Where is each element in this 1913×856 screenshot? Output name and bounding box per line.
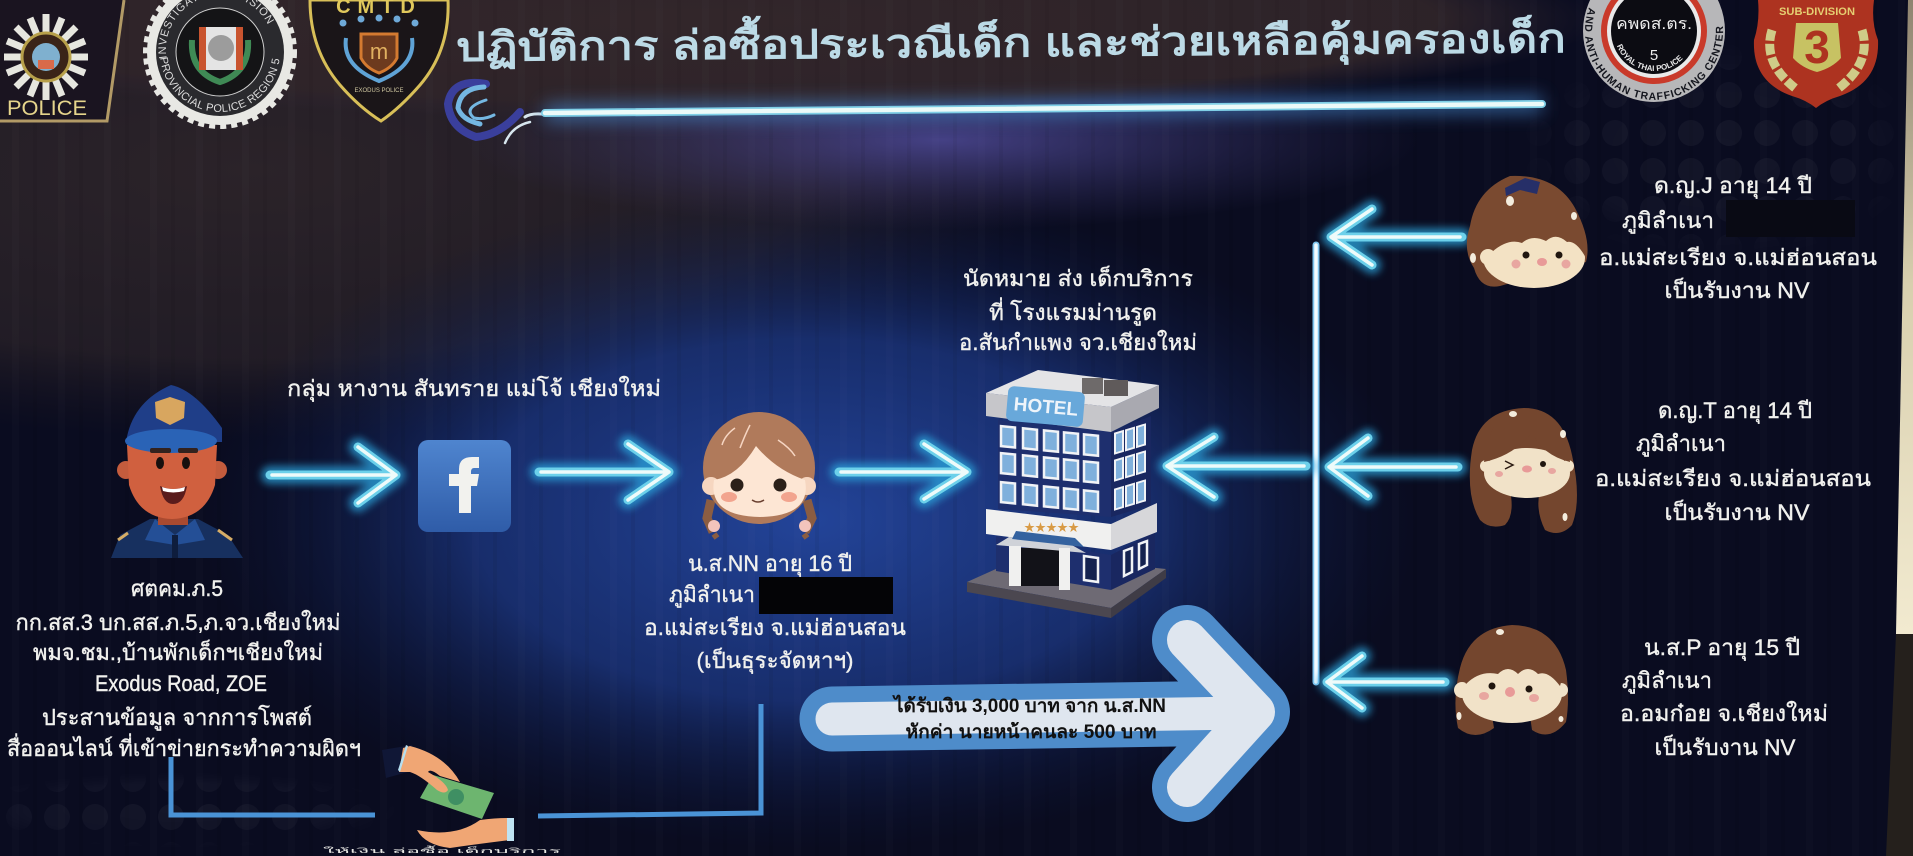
logo: CMTD shield: [310, 0, 448, 121]
logo: CMTD shield: m: [370, 39, 388, 64]
redaction block: [1726, 200, 1855, 237]
girl NN text block: (เป็นธุระจัดหาฯ): [696, 646, 854, 674]
officer text block: พมจ.ชม.,บ้านพักเด็กฯเชียงใหม่: [33, 638, 323, 665]
girl T illustration: [1470, 408, 1577, 533]
title: ปฏิบัติการ ล่อซื้อประเวณีเด็ก และช่วยเหลือคุ้มครองเด็ก: [456, 9, 1566, 73]
arrow: junction to hotel: [1167, 437, 1306, 497]
girl NN text block: น.ส.NN อายุ 16 ปี: [688, 551, 852, 577]
hotel label: อ.สันกำแพง จว.เชียงใหม่: [959, 330, 1197, 355]
officer text block: ประสานข้อมูล จากการโพสต์: [42, 705, 312, 731]
logo: anti human trafficking center: AND ANTI-HUMAN TRAFFICKING CENTER: [1585, 8, 1724, 100]
officer text block: [7, 576, 361, 761]
logo: sub-division 3: 3: [1804, 21, 1830, 73]
facebook group label: กลุ่ม หางาน สันทราย แม่โจ้ เชียงใหม่: [287, 376, 661, 402]
girl T text block: ภูมิลำเนา: [1636, 431, 1726, 457]
girl P illustration: [1454, 625, 1568, 735]
officer text block: Exodus Road, ZOE: [95, 671, 267, 696]
arrow: girl to hotel: [839, 444, 967, 499]
logo: police badge: [0, 0, 124, 121]
hotel label: ที่ โรงแรมม่านรูด: [989, 297, 1157, 326]
big arrow: payment: [832, 640, 1255, 787]
icon: facebook: [418, 440, 511, 532]
logo: sub-division 3: [1754, 0, 1878, 108]
girl J text block: [1599, 173, 1877, 303]
hotel label: นัดหมาย ส่ง เด็กบริการ: [963, 264, 1193, 291]
arrow: girl T: [1329, 438, 1458, 496]
girl NN text block: อ.แม่สะเรียง จ.แม่ฮ่อนสอน: [644, 615, 906, 640]
logo: anti human trafficking center: ROYAL THAI POLICE: [1617, 44, 1683, 71]
hotel sign: [1006, 386, 1085, 427]
vertical connector: victims to hotel: [1309, 245, 1323, 682]
connector: money flow lines: [171, 704, 761, 816]
arrow: facebook to girl: [539, 444, 669, 500]
girl T text block: เป็นรับงาน NV: [1664, 498, 1810, 525]
girl NN text block: ภูมิลำเนา: [669, 582, 755, 608]
money caption, only a sliver visible at the bottom edge: ให้เงิน ล่อซื้อ เด็กบริการ: [323, 844, 562, 855]
girl J text block: ภูมิลำเนา: [1622, 208, 1714, 234]
girl J text block: ด.ญ.J อายุ 14 ปี: [1654, 173, 1812, 199]
redaction block: [759, 577, 893, 614]
girl P text block: อ.อมก๋อย จ.เชียงใหม่: [1620, 701, 1828, 726]
arrow: girl J: [1331, 209, 1462, 265]
logo: anti human trafficking center: 5: [1650, 47, 1658, 64]
logo: CMTD shield: EXODUS POLICE: [354, 88, 404, 94]
arrow: girl P: [1327, 656, 1445, 708]
icon: wave swirl: [448, 83, 550, 143]
officer text block: สื่อออนไลน์ ที่เข้าข่ายกระทำความผิดฯ: [7, 733, 361, 761]
officer text block: กก.สส.3 บก.สส.ภ.5,ภ.จว.เชียงใหม่: [16, 610, 340, 635]
officer text block: ศตคม.ภ.5: [131, 576, 223, 601]
logo: provincial police region 5: [143, 0, 297, 129]
girl T text block: [1595, 398, 1871, 525]
hotel label: [959, 264, 1197, 355]
payment text: ได้รับเงิน 3,000 บาท จาก น.ส.NN: [892, 694, 1166, 717]
girl J text block: เป็นรับงาน NV: [1664, 276, 1810, 303]
girl P text block: [1620, 635, 1828, 760]
hotel illustration: ★★★★★: [1024, 522, 1079, 534]
hotel illustration: [967, 370, 1166, 618]
girl NN text block: [644, 551, 906, 674]
girl P text block: ภูมิลำเนา: [1622, 668, 1712, 694]
payment text: [892, 694, 1166, 743]
officer illustration: [111, 385, 243, 558]
arrow: officer to facebook: [270, 447, 396, 503]
girl NN illustration: [702, 412, 816, 538]
payment text: หักค่า นายหน้าคนละ 500 บาท: [906, 721, 1156, 743]
girl T text block: ด.ญ.T อายุ 14 ปี: [1658, 398, 1812, 424]
logo: sub-division 3: SUB-DIVISION: [1779, 6, 1855, 18]
girl J text block: อ.แม่สะเรียง จ.แม่ฮ่อนสอน: [1599, 245, 1877, 270]
girl P text block: เป็นรับงาน NV: [1654, 733, 1796, 760]
logo: anti human trafficking center: คพดส.ตร.: [1616, 16, 1692, 33]
girl T text block: อ.แม่สะเรียง จ.แม่ฮ่อนสอน: [1595, 466, 1871, 491]
hotel sign: HOTEL: [1013, 394, 1079, 421]
logo: provincial police region 5: PROVINCIAL POLICE REGION 5: [160, 57, 280, 112]
girl J illustration: [1467, 176, 1588, 288]
girl P text block: น.ส.P อายุ 15 ปี: [1644, 635, 1800, 661]
logo: police badge: POLICE: [7, 97, 87, 120]
icon: money handover: [382, 745, 514, 848]
title underline glow: [545, 104, 1542, 113]
